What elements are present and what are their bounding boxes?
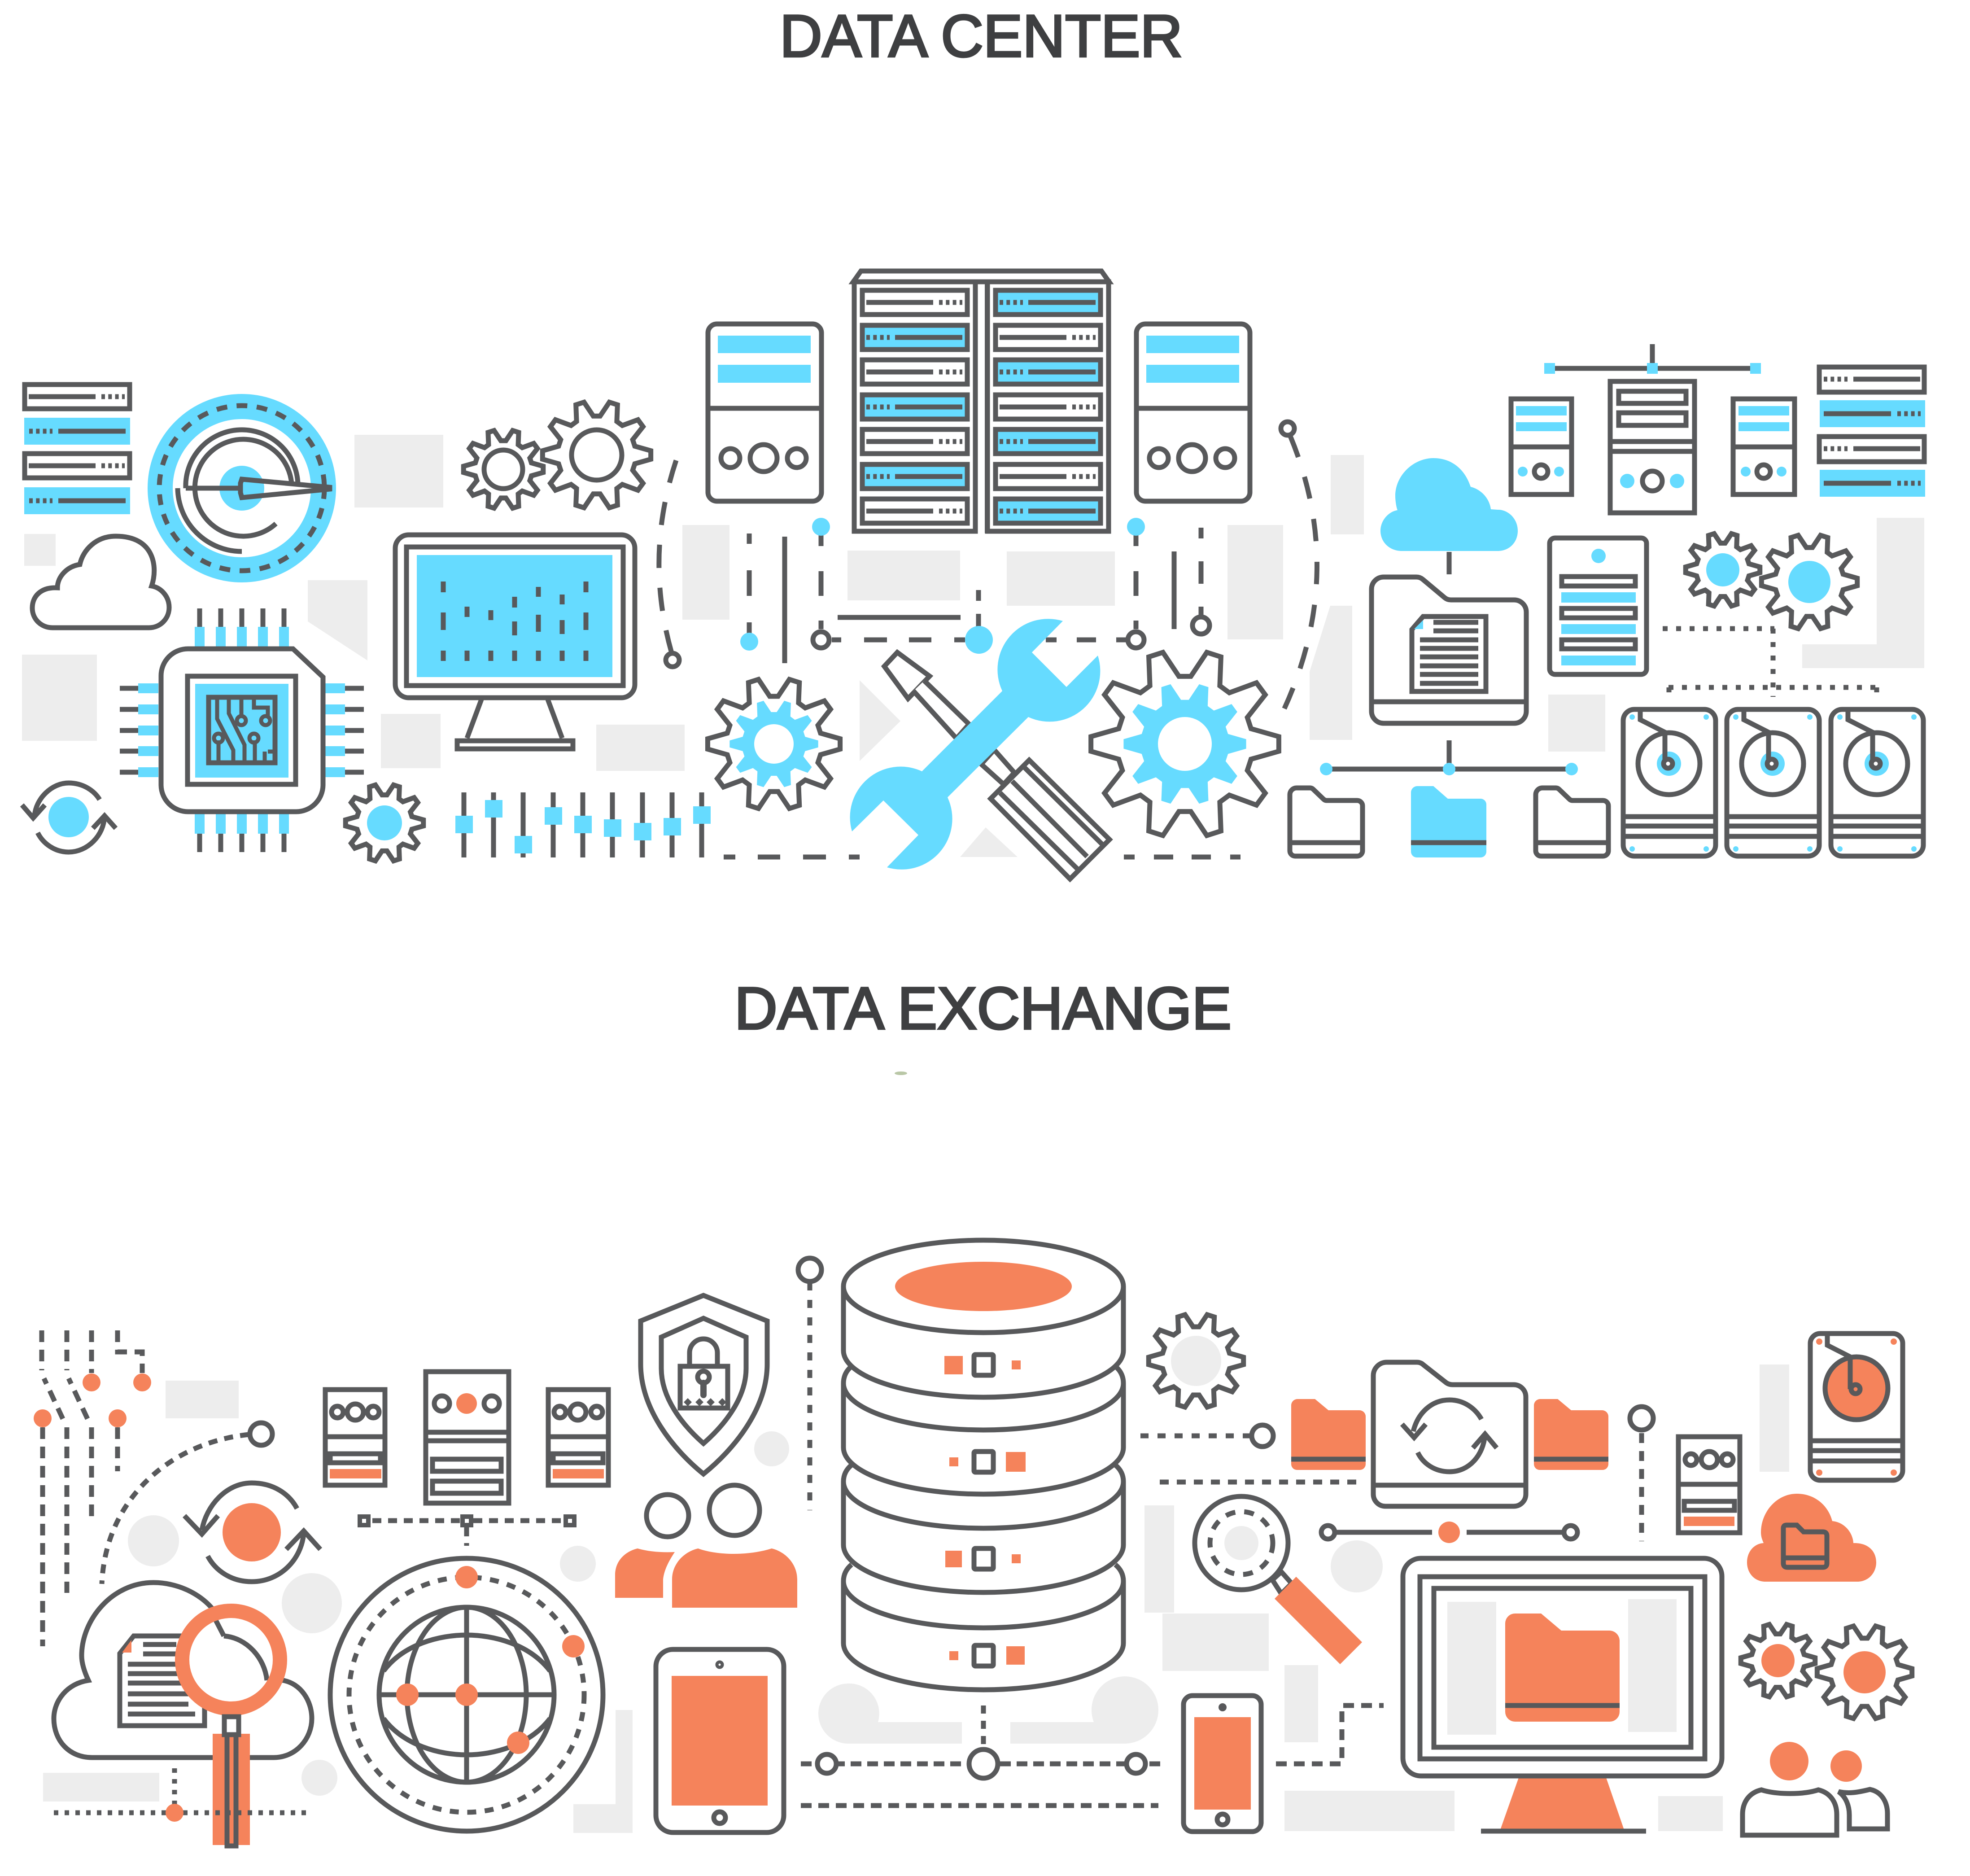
screwdriver (884, 652, 1109, 879)
folders: exchange with sync (1291, 1362, 1608, 1506)
hard drive: orange (1810, 1334, 1903, 1480)
gear: large blue (1091, 652, 1279, 835)
small server: right (1678, 1437, 1740, 1533)
folder: orange left (1291, 1399, 1366, 1470)
cloud outline (32, 536, 169, 628)
folder: left (1290, 788, 1363, 856)
server: right (548, 1390, 608, 1485)
gears: top pair (463, 402, 651, 508)
sync icon: blue (22, 783, 116, 852)
cloud: blue (1380, 458, 1518, 551)
dashed arc with ring (102, 1423, 272, 1584)
rack units: top left (24, 385, 130, 514)
server rack cabinet (853, 271, 1109, 533)
speck (895, 1071, 907, 1075)
monitor: blue (395, 535, 635, 749)
sliders (455, 792, 711, 857)
dotted line with node (54, 1768, 312, 1822)
server tower: left (708, 324, 821, 501)
gauge icon (159, 406, 330, 571)
folder: orange right (1534, 1399, 1608, 1470)
gear: gray (1149, 1315, 1244, 1407)
folder with document (1372, 552, 1526, 764)
server tower: right (1136, 324, 1250, 501)
folder: on screen (1505, 1614, 1620, 1722)
server: center (1610, 381, 1695, 513)
people: outlined (1743, 1742, 1887, 1835)
people: orange (615, 1485, 797, 1608)
title: data exchange: DATA EXCHANGE (734, 975, 1232, 1042)
dashed connectors to folders (1140, 1425, 1357, 1482)
connectors under servers (740, 518, 1210, 663)
rack units: top right (1819, 367, 1925, 497)
sync icon: orange (184, 1483, 320, 1582)
ring with dashes (1630, 1407, 1653, 1541)
folder: right (1536, 788, 1608, 856)
node line (1321, 1522, 1577, 1543)
background shapes: data exchange (43, 1364, 1789, 1833)
connectors below database (801, 1705, 1384, 1806)
background shapes: data center (22, 435, 1924, 857)
dotted connector with nodes (360, 1517, 574, 1546)
magnifier (1195, 1496, 1362, 1664)
dashed arc: left (659, 460, 679, 667)
folder: center (1373, 1362, 1526, 1506)
server: left (325, 1390, 385, 1485)
gear: left blue (708, 679, 840, 809)
tablet (656, 1649, 784, 1832)
hard drives (1623, 709, 1923, 856)
cloud: orange with folder (1747, 1494, 1876, 1582)
server: right (1733, 399, 1795, 494)
globe (330, 1558, 603, 1831)
wrench (850, 619, 1100, 870)
network: small servers top right (1511, 344, 1795, 513)
shield with lock (641, 1295, 767, 1474)
gears: right orange (1741, 1624, 1912, 1719)
cloud with document and magnifier (54, 1583, 312, 1846)
monitor: orange (1403, 1558, 1722, 1831)
server: left (1511, 399, 1572, 494)
dashed arc: right (1281, 422, 1317, 710)
divider and sync arrows (1373, 1400, 1526, 1485)
disk 2 (843, 1366, 1123, 1494)
dashed line with ring above database (798, 1258, 821, 1510)
database (843, 1240, 1123, 1690)
cpu chip (120, 608, 364, 852)
disk 1 (843, 1240, 1123, 1397)
dashed network: top left (34, 1330, 151, 1646)
chip pins (120, 608, 364, 852)
gears: right blue (1686, 534, 1857, 629)
title: data center: DATA CENTER (780, 3, 1183, 70)
dotted connectors to drives (1663, 629, 1878, 699)
connector: baseline dashes (724, 854, 1241, 860)
folder: blue (1411, 786, 1486, 857)
mobile phone (1184, 1696, 1261, 1832)
server panel (1550, 538, 1647, 674)
gear: small blue (345, 785, 424, 861)
disk 4 (843, 1565, 1123, 1690)
disk 3 (843, 1465, 1123, 1592)
file tree (1290, 763, 1608, 857)
small servers above globe (325, 1372, 608, 1503)
server: center (426, 1372, 509, 1503)
